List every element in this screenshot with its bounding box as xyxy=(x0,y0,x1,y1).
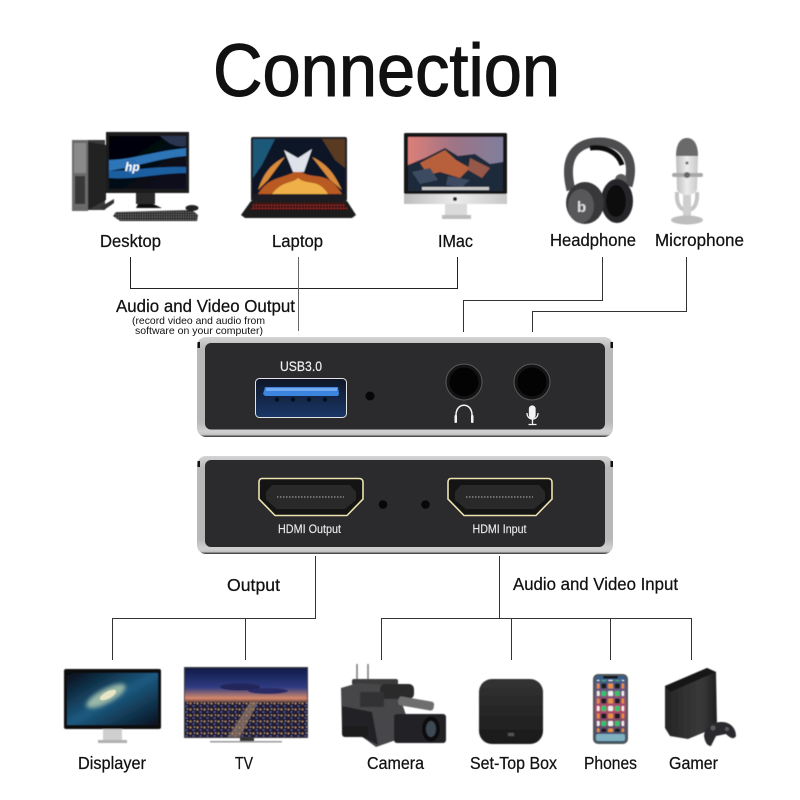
HDMI output port xyxy=(259,478,363,516)
label: Desktop: Desktop xyxy=(100,231,161,251)
icon: TV xyxy=(184,667,308,742)
icon: desktop computer: hp xyxy=(125,160,140,174)
USB port xyxy=(256,378,346,418)
connector line: headphone xyxy=(464,257,602,332)
icon: displayer monitor xyxy=(64,669,161,743)
note: record video and audio: software on your computer) xyxy=(135,325,263,337)
label: TV: TV xyxy=(235,753,253,773)
icon: desktop computer xyxy=(72,132,198,221)
label: Laptop: Laptop xyxy=(272,231,323,251)
icon: phone xyxy=(593,674,628,744)
connector line: microphone xyxy=(532,257,686,332)
label: Set-Top Box: Set-Top Box xyxy=(470,753,557,773)
HDMI input port xyxy=(448,478,552,516)
icon: iMac xyxy=(404,133,507,219)
indicator lights xyxy=(379,500,430,509)
label: Audio and Video Input: Audio and Video Input xyxy=(513,574,678,594)
label: Gamer: Gamer xyxy=(669,753,718,773)
label: Microphone: Microphone xyxy=(655,230,744,250)
panel: HDMI device face xyxy=(197,456,613,554)
icon: headphone symbol xyxy=(454,405,474,423)
icon: microphone symbol xyxy=(527,406,538,424)
icon: laptop xyxy=(241,137,356,218)
icon: headphones: b xyxy=(577,199,586,216)
connector lines: computers to USB output xyxy=(130,257,458,331)
headphone jack xyxy=(446,364,482,400)
note: record video and audio: (record video and audio from xyxy=(132,315,265,327)
microphone jack xyxy=(514,364,550,400)
label: HDMI Input: HDMI Input xyxy=(472,524,527,536)
label: Camera: Camera xyxy=(367,753,424,773)
indicator light xyxy=(366,392,374,400)
label: USB3.0: USB3.0 xyxy=(280,358,322,374)
label: Audio and Video Output: Audio and Video Output xyxy=(116,296,295,316)
label: Phones: Phones xyxy=(584,753,637,773)
icon: game console xyxy=(665,668,736,746)
label: Displayer: Displayer xyxy=(78,753,146,773)
note: record video and audio xyxy=(132,315,265,337)
label: Headphone: Headphone xyxy=(550,230,636,250)
label: Output: Output xyxy=(227,575,280,595)
icon: video camera xyxy=(341,664,446,747)
title: Connection xyxy=(213,29,560,112)
connector lines: input xyxy=(382,556,692,660)
icon: set-top box xyxy=(479,679,543,744)
label: HDMI Output: HDMI Output xyxy=(278,524,342,536)
icon: microphone xyxy=(671,138,703,224)
icon: headphones xyxy=(566,142,633,224)
connector lines: output xyxy=(112,556,316,660)
label: IMac: IMac xyxy=(438,231,473,251)
panel: USB device face xyxy=(197,337,613,437)
